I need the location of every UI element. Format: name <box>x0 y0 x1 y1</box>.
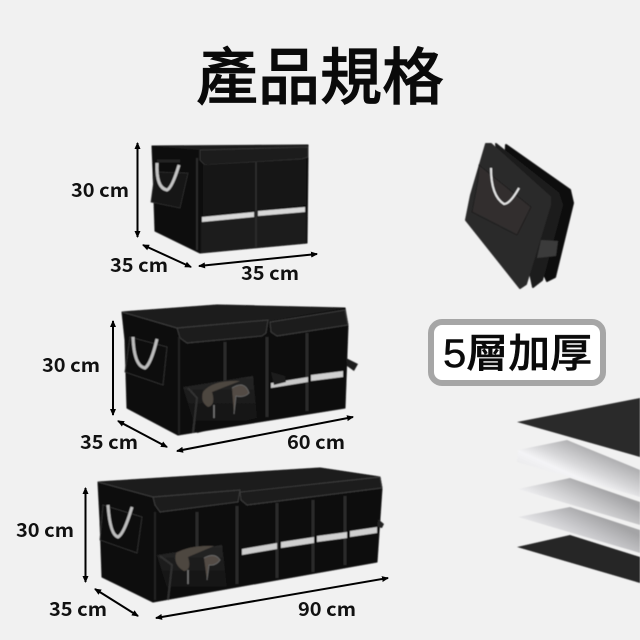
badge text: 5層加厚 <box>443 332 592 376</box>
medium box photo <box>122 305 358 435</box>
layer 4: grey board <box>518 507 640 553</box>
title: 產品規格 <box>196 44 444 113</box>
panel: medium organizer 35x60x30 <box>42 305 358 455</box>
label: depth: 35 cm <box>80 428 138 455</box>
arrow: depth <box>118 421 167 447</box>
label: height: 30 cm <box>16 516 74 543</box>
small box photo <box>151 145 308 253</box>
arrow: depth <box>143 245 191 267</box>
arrow: height <box>84 488 86 582</box>
label: height: 30 cm <box>71 176 129 203</box>
panel: small organizer 35x35x30 <box>71 143 317 286</box>
layer 5: black fabric <box>517 535 640 583</box>
badge frame <box>431 322 603 383</box>
arrow: width <box>177 417 353 451</box>
label: depth: 35 cm <box>49 595 107 622</box>
icon: material layers <box>517 398 640 583</box>
large box photo <box>98 468 384 602</box>
label: depth: 35 cm <box>110 251 168 278</box>
label: width: 60 cm <box>287 428 345 455</box>
arrow: depth <box>95 589 138 616</box>
layer 1: black fabric <box>517 398 640 457</box>
arrow: height <box>136 143 138 237</box>
panel: large organizer 35x90x30 <box>16 468 388 622</box>
layer 2: white foam <box>517 440 640 497</box>
arrow: width <box>156 578 388 618</box>
callout: 5 layers thick <box>431 322 603 383</box>
layer 3: grey board <box>518 478 640 525</box>
label: width: 35 cm <box>241 259 299 286</box>
label: width: 90 cm <box>298 595 356 622</box>
label: height: 30 cm <box>42 351 100 378</box>
arrow: height <box>112 321 114 415</box>
arrow: width <box>199 254 317 266</box>
icon: folded organizer <box>466 144 573 288</box>
